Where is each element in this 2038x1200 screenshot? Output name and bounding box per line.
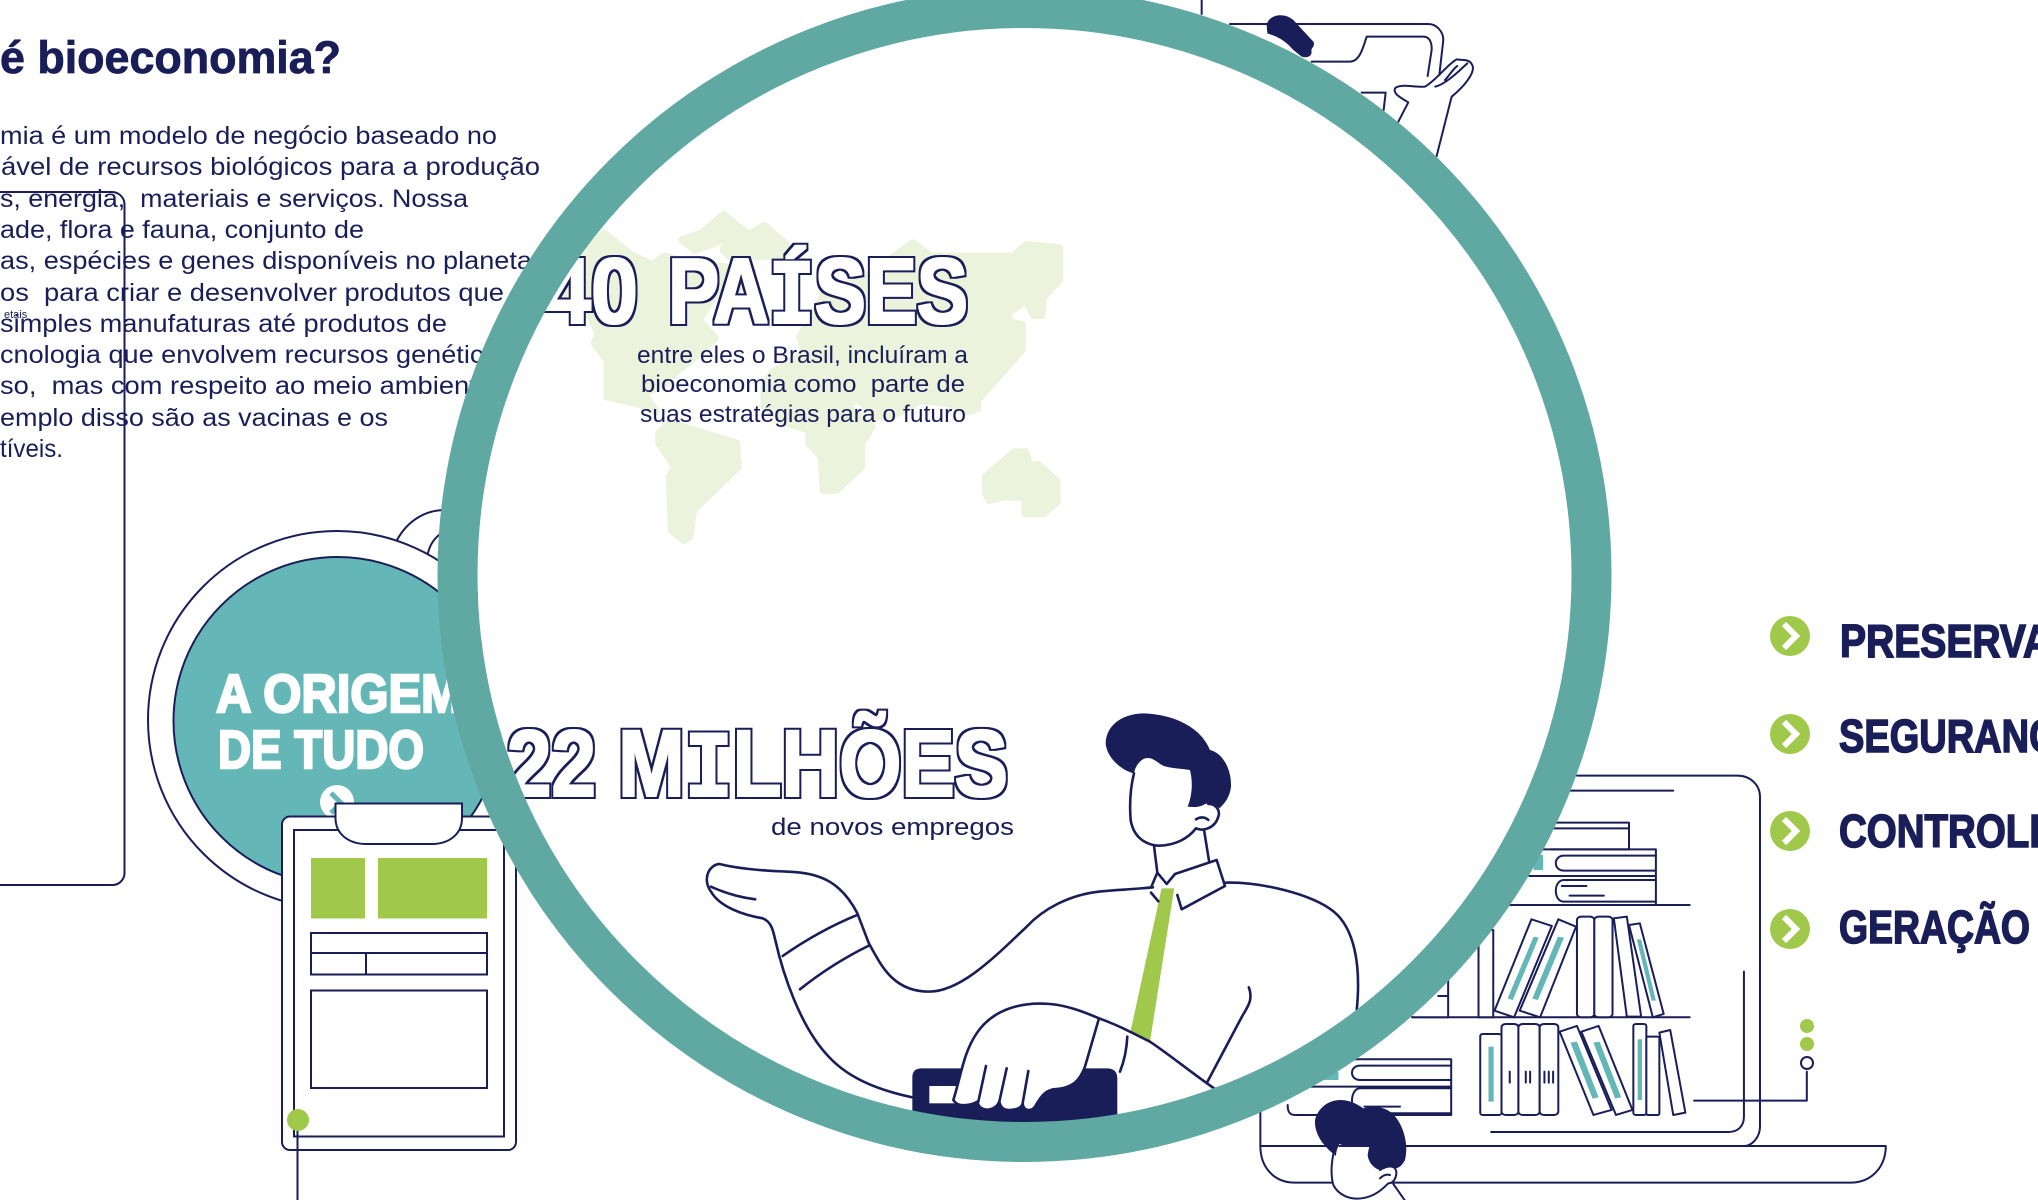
text block: definition of bioeconomy (0, 122, 540, 463)
illustration: hand and screen at top right (1202, 0, 1473, 156)
stat: 40 países: 40 (544, 239, 638, 343)
small caption fragment: etais (4, 309, 28, 321)
text block: definition of bioeconomy: emplo disso são as vacinas e os (0, 404, 388, 432)
text block: definition of bioeconomy: as, espécies e genes disponíveis no planeta (0, 247, 532, 275)
stat: 22 milhões: 22 MILHÕES (507, 711, 1008, 825)
stat: 40 países: PAÍSES (668, 239, 968, 351)
hand on tablet (953, 1004, 1215, 1110)
indicator dots (1800, 1019, 1814, 1069)
stat description: 40 países: suas estratégias para o futuro (640, 401, 966, 428)
body and sleeve (707, 864, 1358, 1097)
middle book row (1412, 917, 1664, 1017)
stat description: 22 milhões: de novos empregos (771, 814, 1014, 841)
panel: central circle background (478, 28, 1572, 1122)
lower book row (1480, 1024, 1685, 1115)
small character head at bottom (1315, 1100, 1406, 1200)
icon: small circle behind badge (397, 510, 445, 553)
text block: definition of bioeconomy: simples manufaturas até produtos de (0, 310, 447, 338)
text block: definition of bioeconomy: ade, flora e fauna, conjunto de (0, 216, 364, 244)
text block: definition of bioeconomy: cnologia que envolvem recursos genéticos (0, 341, 512, 369)
heading: o que é bioeconomia: é bioeconomia? (0, 32, 341, 83)
tablet (912, 1068, 1117, 1133)
stat description: 40 países (637, 342, 969, 428)
upper book stack (1529, 823, 1656, 905)
illustration: laptop with bookshelf (1260, 776, 1886, 1183)
badge: a origem de tudo: A ORIGEM (216, 664, 462, 724)
text block: definition of bioeconomy: s, energia, materiais e serviços. Nossa (0, 185, 468, 213)
text block: definition of bioeconomy: so, mas com respeito ao meio ambiente (0, 372, 492, 400)
stat description: 40 países: bioeconomia como parte de (641, 371, 965, 398)
stat: 40 países (544, 239, 968, 351)
bottom book stack (1288, 1059, 1451, 1115)
text block: definition of bioeconomy: tíveis. (0, 435, 63, 463)
circle ring (458, 8, 1592, 1142)
badge: a origem de tudo (148, 531, 526, 909)
panel: rounded outline box (0, 192, 124, 885)
text block: definition of bioeconomy: mia é um modelo de negócio baseado no (0, 122, 497, 150)
head and collar (1106, 713, 1231, 909)
necktie (1131, 888, 1174, 1041)
text block: definition of bioeconomy: os para criar e desenvolver produtos que (0, 279, 504, 307)
laptop outline (1260, 776, 1886, 1183)
stat description: 40 países: entre eles o Brasil, incluíram a (637, 342, 969, 369)
icon: clipboard (282, 804, 516, 1200)
illustration: man presenting (707, 713, 1358, 1133)
text block: definition of bioeconomy: ável de recursos biológicos para a produção (1, 153, 540, 181)
world map (561, 215, 1059, 540)
badge: a origem de tudo: DE TUDO (218, 720, 424, 780)
